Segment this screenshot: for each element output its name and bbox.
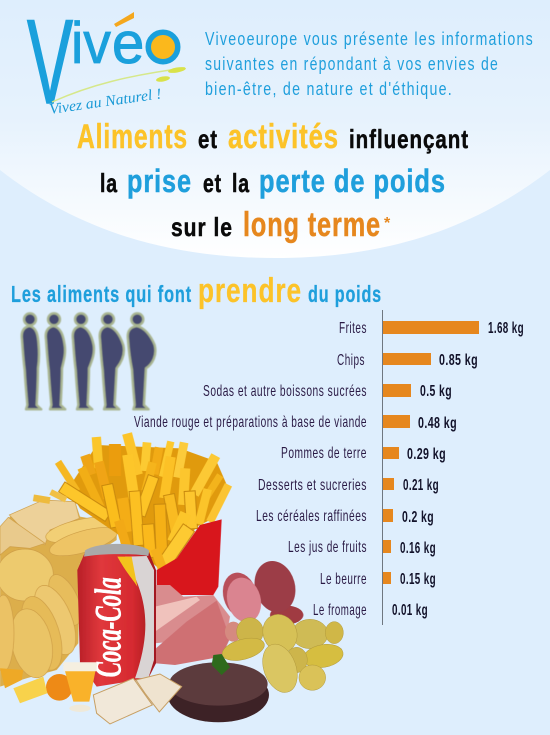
bar row: Beurre: Le beurre [320, 571, 367, 588]
section heading [11, 272, 382, 310]
logo: Vivéo [26, 12, 186, 114]
bar row: Frites [339, 320, 524, 337]
title: prise [127, 163, 192, 199]
title: activités [228, 118, 339, 156]
title: * [384, 215, 391, 232]
bar row: Pommes de terre: Pommes de terre [281, 445, 367, 462]
bar row: Céréales: 0.2 kg [402, 509, 434, 526]
section heading: du poids [308, 281, 382, 307]
header glow ellipse [0, 0, 550, 258]
intro text [205, 29, 534, 99]
orange [46, 674, 73, 701]
bar row: Chips: Chips [337, 352, 365, 369]
bar row: Frites: Frites [339, 320, 367, 337]
illustration: pile of food [0, 438, 345, 724]
bar row: Desserts: Desserts et sucreries [258, 477, 367, 494]
title: et [198, 124, 218, 154]
bar row: Sodas: 0.5 kg [420, 383, 452, 400]
bar row: Viande rouge: 0.48 kg [418, 415, 457, 432]
butter [0, 668, 47, 703]
title: Aliments [77, 118, 188, 156]
bar row: Frites: 1.68 kg [488, 320, 524, 337]
bar row: Beurre [320, 571, 436, 588]
sausages [218, 556, 303, 642]
potatoes [220, 609, 345, 697]
intro text: bien-être, de nature et d'éthique. [205, 79, 453, 99]
bar row: Céréales: Les céréales raffinées [256, 508, 367, 525]
bar row: Fromage: Le fromage [313, 602, 367, 619]
title [77, 118, 469, 244]
bar row: Desserts: 0.21 kg [403, 477, 439, 494]
bar row: Pommes de terre: 0.29 kg [407, 446, 446, 463]
soda can [77, 544, 156, 687]
bar row: Fromage: 0.01 kg [392, 602, 428, 619]
logo: Vivéo: iv [71, 11, 111, 76]
red meat [155, 601, 230, 665]
soda can: Coca-Cola [89, 577, 130, 677]
fries [37, 438, 228, 567]
chips stack [0, 500, 120, 687]
title: et [203, 168, 222, 198]
juice glass [63, 662, 97, 712]
bar row: Jus de fruits: 0.16 kg [400, 540, 436, 557]
title: perte de poids [259, 163, 446, 199]
title: la [100, 168, 118, 198]
bar row: Viande rouge: Viande rouge et préparations à base de viande [134, 414, 367, 431]
section heading: Les aliments qui font [11, 281, 192, 307]
icon: five silhouettes gaining weight [22, 313, 155, 409]
title: influençant [349, 124, 469, 154]
logo: Vivéo: Vivez au Naturel ! [48, 86, 162, 118]
bar row: Beurre: 0.15 kg [400, 571, 436, 588]
bar row: Sodas: Sodas et autre boissons sucrées [203, 383, 367, 400]
section heading: prendre [198, 272, 302, 310]
logo: Vivéo: é [112, 11, 144, 76]
ham slices [155, 585, 230, 643]
fries carton [157, 519, 222, 595]
bar row: Chips: 0.85 kg [439, 352, 478, 369]
chocolate cake [168, 654, 269, 722]
title: long terme [243, 206, 381, 244]
bar row: Jus de fruits: Les jus de fruits [288, 539, 367, 556]
bar chart: weight gain per food [134, 310, 524, 625]
bar row: Chips [337, 352, 478, 369]
title: la [232, 168, 250, 198]
bread slices [93, 674, 182, 724]
title: sur le [171, 212, 233, 242]
